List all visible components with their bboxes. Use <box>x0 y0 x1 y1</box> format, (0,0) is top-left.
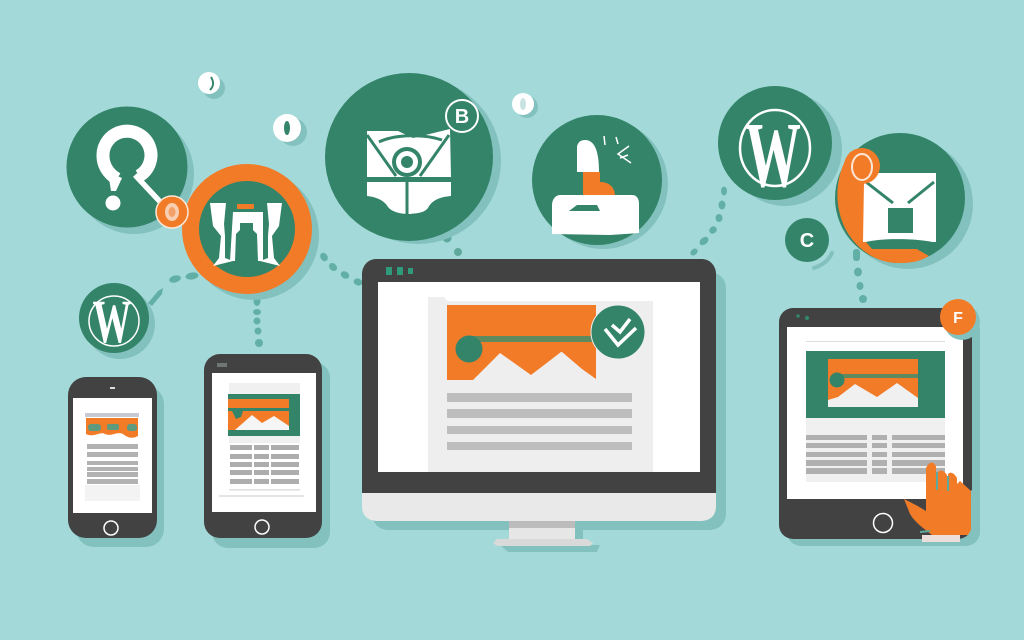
badge: letter B <box>446 100 478 132</box>
badge: orange corner: F <box>953 310 963 327</box>
wordpress badge small <box>79 283 155 359</box>
dotted connector: large icon to monitor <box>442 234 462 256</box>
small orange envelope node <box>844 148 880 184</box>
circle: orange ring with building icon <box>182 164 319 300</box>
badge: letter C: C <box>800 230 814 252</box>
badge: orange corner <box>940 299 980 340</box>
dotted connector: envelope to right tablet <box>853 249 867 303</box>
circle: wordpress logo <box>718 86 842 207</box>
small white badge three <box>512 93 538 118</box>
phone <box>68 377 164 547</box>
hand pointer <box>904 462 974 542</box>
badge: letter C <box>785 218 832 268</box>
circle: large mail icon <box>325 73 501 244</box>
dotted connector: orange ring to tablet <box>253 296 263 347</box>
badge: letter B: B <box>455 106 469 128</box>
small orange node <box>156 196 188 228</box>
small white badge one <box>198 72 225 99</box>
dotted connector: wordpress circle to monitor <box>689 186 727 257</box>
circle: envelope with orange edge <box>835 133 973 269</box>
small tablet <box>204 354 330 548</box>
dotted connector: orange ring to monitor <box>319 251 363 287</box>
dotted connector: wordpress badge to orange ring <box>148 272 199 306</box>
circle: touch press icon <box>532 115 668 249</box>
small white badge two <box>273 114 307 146</box>
desktop monitor <box>362 259 726 552</box>
circle: question mark <box>66 106 194 234</box>
wordpress badge small: W <box>93 288 131 356</box>
circle: wordpress logo: W <box>745 104 801 207</box>
large tablet <box>779 308 980 546</box>
